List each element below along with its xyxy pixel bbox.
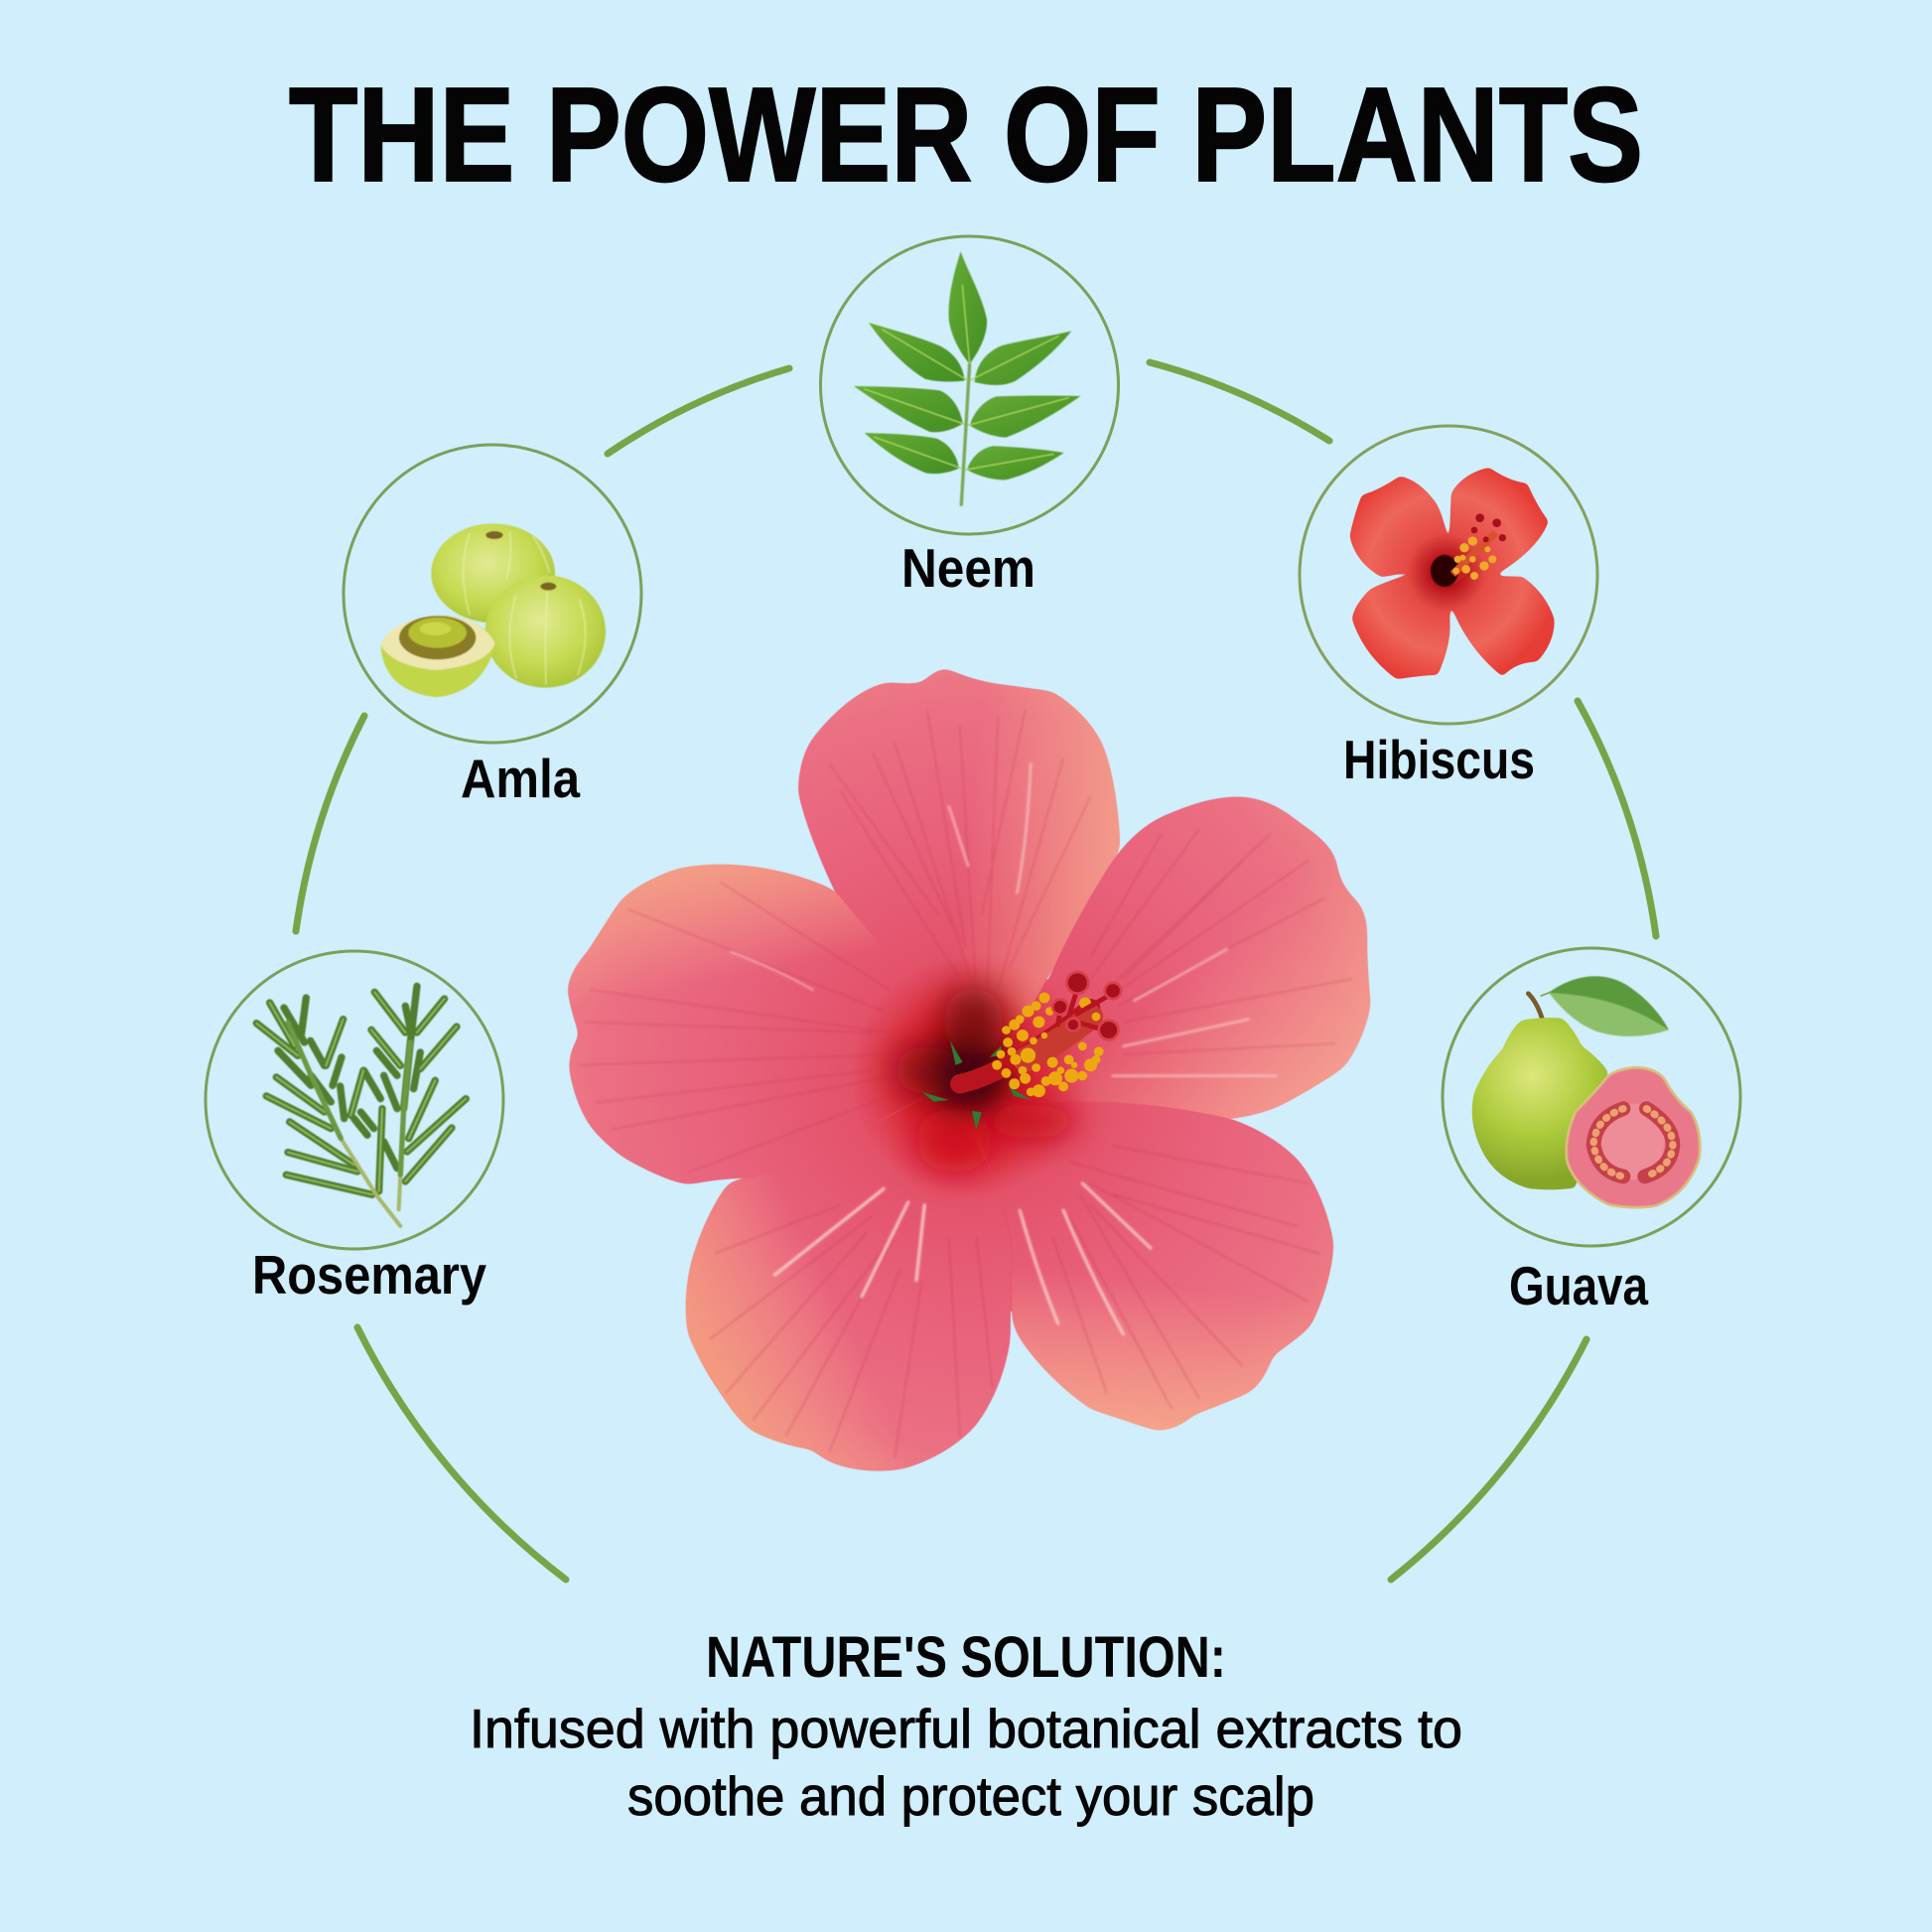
label: Guava: [1509, 1255, 1648, 1316]
stamen column with anthers and stigma: [960, 972, 1121, 1097]
circle frame: [1443, 948, 1740, 1246]
petal backing: [818, 947, 1173, 1312]
circle frame: [820, 236, 1118, 534]
petal: left: [567, 864, 954, 1185]
circle frame: [344, 445, 641, 743]
petal: top: [797, 668, 1121, 1054]
icon: neem leaf: [854, 251, 1080, 504]
label: Neem: [901, 537, 1035, 599]
petal: lower left: [685, 1097, 1012, 1471]
circle frame: [206, 951, 503, 1249]
label: Hibiscus: [1343, 729, 1535, 790]
bottom message: [470, 1625, 1462, 1827]
central hibiscus flower: [567, 668, 1371, 1471]
icon: amla fruits: [380, 523, 606, 697]
title: THE POWER OF PLANTS: [289, 60, 1643, 209]
item: Rosemary: [206, 951, 503, 1306]
item: Guava: [1443, 948, 1740, 1316]
item: Hibiscus: [1300, 426, 1597, 790]
body line one: Infused with powerful botanical extracts to: [470, 1698, 1462, 1759]
petal: lower right: [979, 1101, 1334, 1431]
sub-heading: NATURE'S SOLUTION:: [706, 1625, 1226, 1690]
label: Rosemary: [252, 1244, 486, 1306]
flower throat: [876, 984, 1080, 1173]
icon: guava fruit: [1472, 976, 1700, 1207]
item: Neem: [820, 236, 1118, 599]
body line two: soothe and protect your scalp: [627, 1765, 1314, 1827]
petal: right: [982, 796, 1371, 1130]
circle frame: [1300, 426, 1597, 724]
label: Amla: [461, 748, 580, 809]
sepal tips: [921, 1040, 1031, 1130]
item: Amla: [344, 445, 641, 809]
icon: red hibiscus: [1349, 468, 1555, 679]
connecting ring arcs: [296, 362, 1656, 1580]
icon: rosemary sprigs: [256, 986, 466, 1226]
